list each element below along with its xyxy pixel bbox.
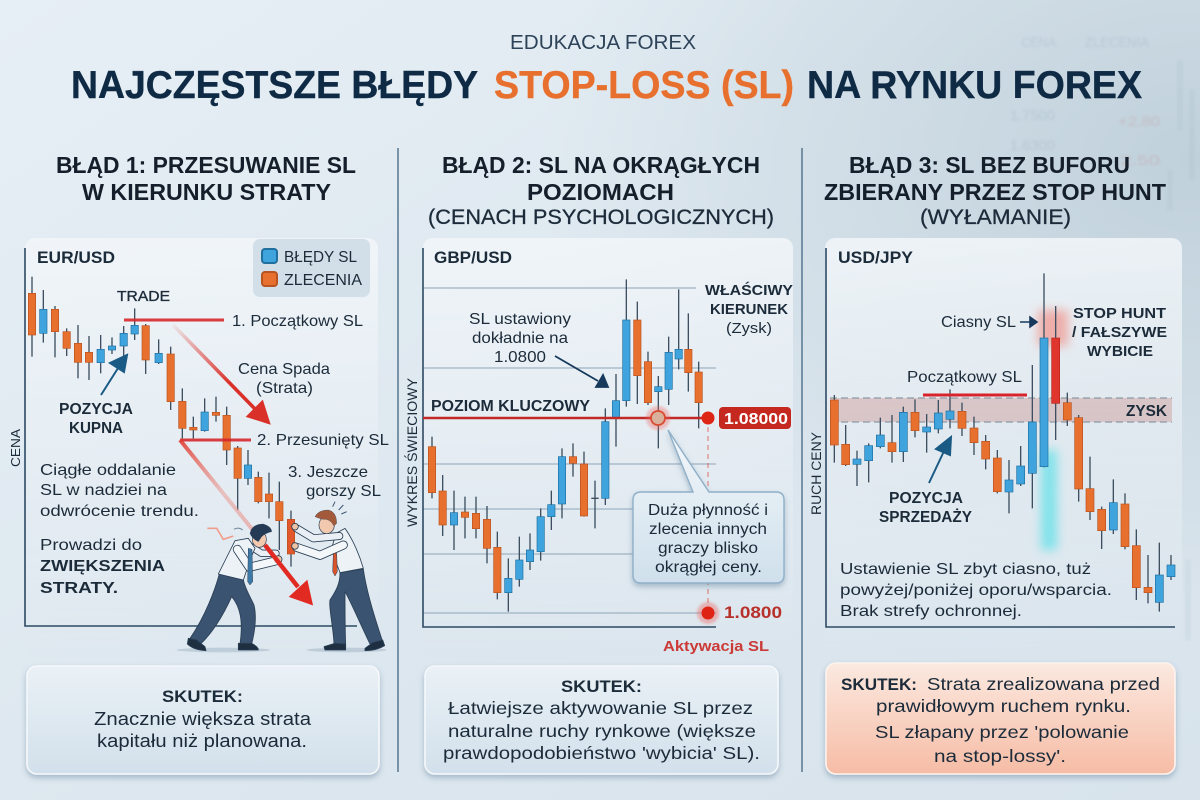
arrow: short position — [929, 437, 951, 483]
text: explanation: odwrócenie trendu. — [40, 503, 199, 520]
arrow: long position — [101, 355, 127, 395]
label: jeszcze gorszy SL: 3. Jeszcze — [288, 464, 368, 481]
label: jeszcze gorszy SL — [288, 464, 381, 500]
label: cena spada — [238, 361, 330, 397]
heading: błąd 2: POZIOMACH — [527, 179, 674, 205]
price dot 1.0800 — [697, 602, 782, 624]
label: SL ustawiony: SL ustawiony — [469, 311, 571, 328]
effect box 3: prawidłowym ruchem rynku. — [876, 696, 1131, 716]
effect box 1: kapitału niż planowana. — [97, 731, 307, 751]
label: właściwy kierunek: (Zysk) — [726, 320, 772, 337]
axis label: wykres świecowy: WYKRES ŚWIECIOWY — [403, 377, 420, 527]
label: stop hunt: STOP HUNT — [1073, 305, 1166, 322]
effect box 3: na stop-lossy'. — [934, 746, 1066, 766]
candlesticks — [830, 273, 1175, 612]
main title: STOP-LOSS (SL) — [494, 64, 794, 107]
background: 2.50 — [1120, 152, 1160, 168]
axes — [826, 248, 1175, 627]
label: pair GBP/USD: GBP/USD — [434, 248, 512, 267]
text: explanation: Prowadzi do — [40, 537, 142, 554]
effect box 2: prawdopodobieństwo 'wybicia' SL). — [443, 743, 760, 763]
axes — [423, 248, 716, 627]
heading: błąd 2: BŁĄD 2: SL NA OKRĄGŁYCH — [442, 152, 760, 178]
label: właściwy kierunek: WŁAŚCIWY — [705, 281, 793, 299]
illustration: two businessmen pushing — [177, 502, 387, 652]
effect box 1: SKUTEK: — [162, 687, 243, 706]
callout: liquidity: zlecenia innych — [649, 521, 767, 538]
legend: BŁĘDY SL — [284, 249, 357, 266]
marker at round price — [646, 406, 670, 430]
effect box 2: SKUTEK: — [561, 677, 642, 696]
axis label: cena: CENA — [8, 429, 23, 467]
label: SL ustawiony: 1.0800 — [494, 349, 546, 366]
background: 1.6300 — [1010, 137, 1055, 153]
main title: NA RYNKU FOREX — [807, 64, 1142, 107]
heading: błąd 3: ZBIERANY PRZEZ STOP HUNT — [824, 179, 1166, 205]
label: początkowy SL: Początkowy SL — [907, 369, 1022, 386]
text: explanation — [840, 561, 1112, 620]
label: przesunięty SL: 2. Przesunięty SL — [257, 432, 389, 449]
SL line 1 — [124, 318, 224, 322]
arrow: to SL level — [555, 356, 608, 387]
text: explanation: Ciągłe oddalanie — [40, 462, 176, 479]
label: pozycja kupna — [59, 401, 133, 437]
label: pozycja kupna: KUPNA — [69, 420, 123, 437]
text: explanation: powyżej/poniżej oporu/wsparcia. — [840, 582, 1112, 599]
label: właściwy kierunek — [705, 281, 793, 337]
heading: błąd 1: W KIERUNKU STRATY — [82, 179, 331, 205]
panel: błąd 1 chart — [8, 238, 389, 658]
price dot 1.0800: 1.0800 — [724, 603, 782, 622]
text: explanation: Brak strefy ochronnej. — [840, 603, 1022, 620]
kicker: Edukacja Forex: EDUKACJA FOREX — [510, 32, 696, 54]
panel: błąd 3 chart — [809, 238, 1182, 658]
glow: stop hunt — [1038, 310, 1068, 550]
arrow: price falling — [173, 325, 268, 422]
column dividers — [398, 148, 802, 772]
heading: błąd 3: (WYŁAMANIE) — [920, 206, 1071, 229]
text: explanation: Ustawienie SL zbyt ciasno, tuż — [840, 561, 1091, 578]
grid lines — [423, 288, 716, 613]
label: cena spada: Cena Spada — [238, 361, 330, 378]
label: pozycja kupna: POZYCJA — [59, 401, 133, 418]
label: SL ustawiony: dokładnie na — [472, 330, 568, 347]
arrow: ciasny SL — [1020, 317, 1037, 327]
zone: zysk — [830, 398, 1172, 422]
initial SL line — [923, 394, 1027, 396]
price tag 1.08000 — [702, 407, 791, 429]
right man — [292, 510, 385, 651]
callout: liquidity — [633, 430, 784, 583]
main title — [71, 64, 1142, 107]
effect box 3: SKUTEK: — [841, 675, 917, 694]
background: CENA — [1021, 34, 1057, 50]
effect box 1 — [27, 666, 379, 774]
heading: błąd 2: (CENACH PSYCHOLOGICZNYCH) — [428, 206, 774, 229]
candlesticks — [28, 277, 295, 567]
label: SL ustawiony — [469, 311, 571, 366]
text: explanation — [40, 462, 199, 597]
heading: błąd 1: BŁĄD 1: PRZESUWANIE SL — [56, 152, 356, 178]
price tag 1.08000: 1.08000 — [724, 411, 788, 428]
effect box 2: naturalne ruchy rynkowe (większe — [448, 721, 756, 741]
label: pozycja sprzedaży: SPRZEDAŻY — [879, 508, 972, 526]
heading: błąd 2 — [428, 152, 774, 229]
heading: błąd 1 — [56, 152, 356, 205]
heading: błąd 3 — [824, 152, 1166, 229]
effect box 1: Znacznie większa strata — [94, 709, 312, 729]
effect box 3 — [826, 663, 1175, 774]
arrow: loss deepening — [265, 545, 310, 602]
callout: liquidity: graczy blisko — [658, 540, 758, 557]
label: stop hunt — [1072, 305, 1167, 360]
axes — [25, 248, 357, 626]
label: początkowy SL: 1. Początkowy SL — [232, 313, 363, 330]
label: właściwy kierunek: KIERUNEK — [710, 301, 788, 318]
main title: NAJCZĘSTSZE BŁĘDY — [71, 64, 478, 107]
legend — [253, 239, 370, 297]
text: explanation: ZWIĘKSZENIA — [40, 558, 166, 575]
effect box 2: Łatwiejsze aktywowanie SL przez — [448, 698, 753, 718]
arrow: faded continuation — [180, 440, 265, 545]
label: zysk: ZYSK — [1126, 403, 1167, 420]
callout: liquidity: Duża płynność i — [648, 502, 768, 519]
key level line — [423, 414, 708, 422]
heading: błąd 3: BŁĄD 3: SL BEZ BUFORU — [849, 152, 1130, 178]
callout: liquidity: okrągłej ceny. — [655, 559, 762, 576]
label: aktywacja SL: Aktywacja SL — [663, 638, 769, 655]
background: +2.80 — [1118, 113, 1160, 129]
effect box 3: SL złapany przez 'polowanie — [875, 722, 1129, 742]
label: jeszcze gorszy SL: gorszy SL — [306, 483, 381, 500]
label: cena spada: (Strata) — [256, 380, 313, 397]
text: explanation: STRATY. — [40, 580, 118, 597]
background: ZLECENIA — [1085, 34, 1150, 50]
label: poziom kluczowy: POZIOM KLUCZOWY — [431, 398, 590, 415]
effect box 2 — [425, 666, 778, 774]
panel: błąd 2 chart — [403, 238, 793, 658]
label: pozycja sprzedaży — [879, 490, 972, 526]
left man — [187, 524, 282, 651]
dashed activation line — [707, 418, 709, 613]
effect box 3: Strata zrealizowana przed — [927, 674, 1160, 694]
background: 1.7500 — [1010, 107, 1055, 123]
label: stop hunt: / FAŁSZYWE — [1072, 324, 1167, 341]
legend: ZLECENIA — [284, 272, 362, 289]
label: pair USD/JPY: USD/JPY — [838, 248, 914, 267]
text: explanation: SL w nadziei na — [40, 482, 167, 499]
label: trade: TRADE — [117, 288, 170, 305]
label: pair EUR/USD: EUR/USD — [37, 248, 115, 267]
label: stop hunt: WYBICIE — [1087, 343, 1153, 360]
label: ciasny SL: Ciasny SL — [941, 314, 1016, 331]
label: pozycja sprzedaży: POZYCJA — [889, 490, 963, 507]
SL line 2 — [180, 438, 251, 442]
axis label: ruch ceny: RUCH CENY — [809, 432, 824, 515]
candlesticks — [428, 279, 702, 612]
